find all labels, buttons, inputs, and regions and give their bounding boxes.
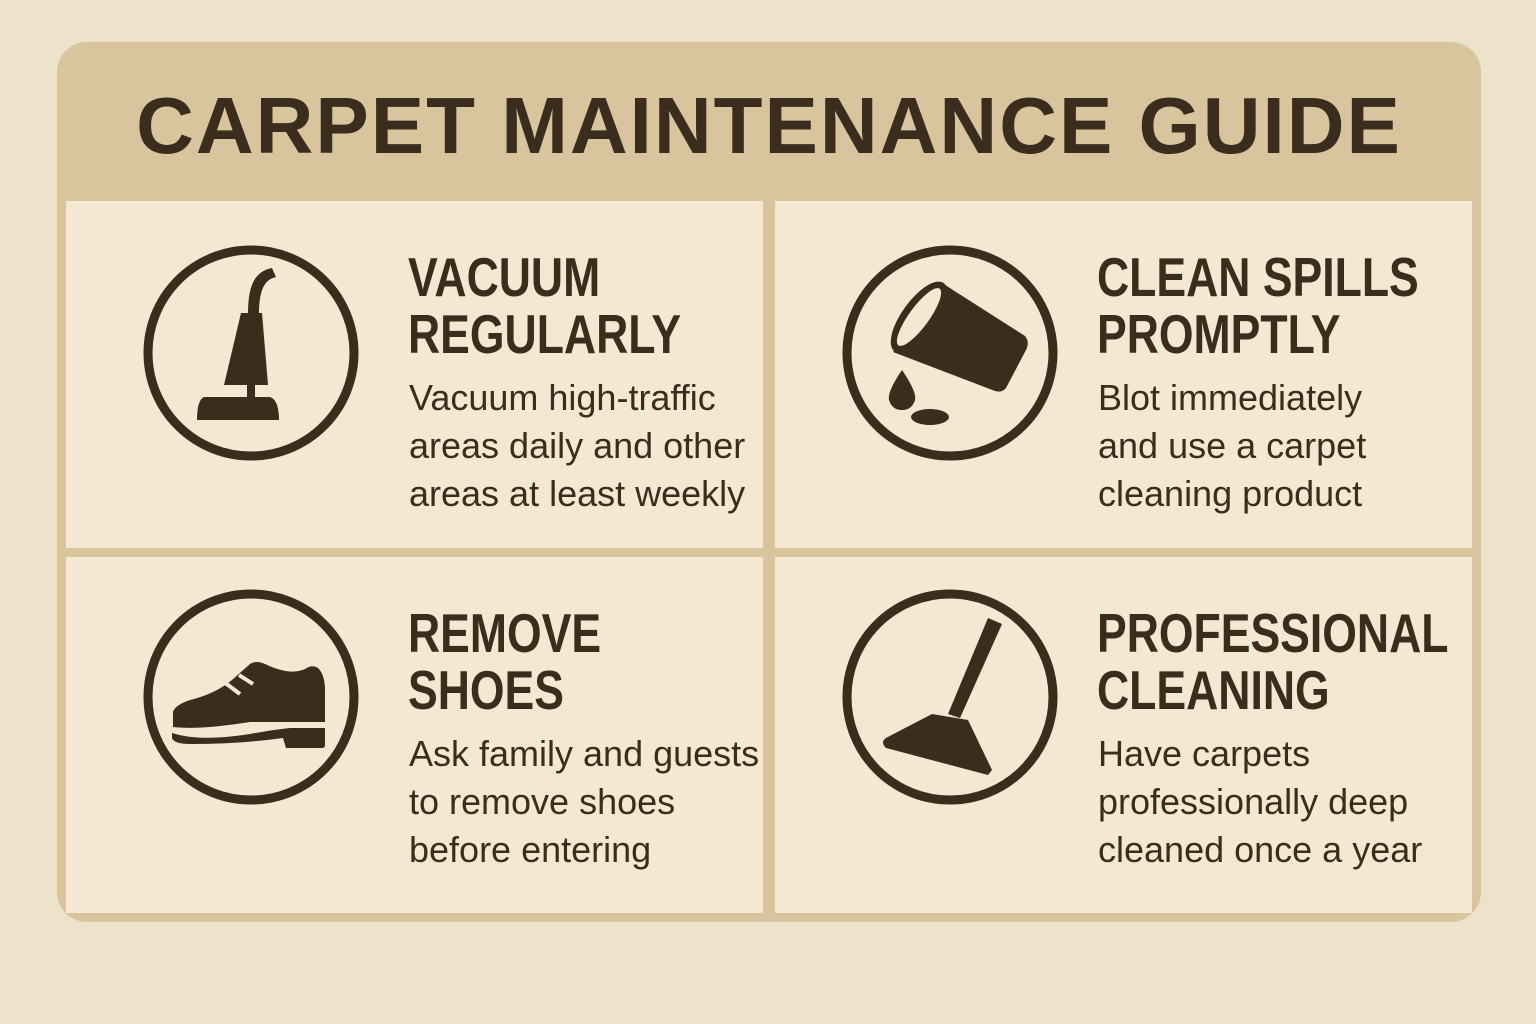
heading: spills: CLEAN SPILLS [1097, 246, 1419, 308]
text: shoes: before entering [409, 829, 651, 870]
heading: shoes [408, 602, 601, 721]
heading: vacuum: VACUUM [408, 246, 600, 308]
text: professional: cleaned once a year [1098, 829, 1422, 870]
icon: spill [847, 250, 1053, 456]
text: shoes: Ask family and guests [409, 733, 759, 774]
text: spills: Blot immediately [1098, 377, 1362, 418]
card [57, 42, 1481, 922]
heading: professional: CLEANING [1097, 659, 1330, 721]
text: spills [1098, 377, 1366, 514]
text: professional: professionally deep [1098, 781, 1408, 822]
text: professional [1098, 733, 1422, 870]
text: professional: Have carpets [1098, 733, 1310, 774]
panel: professional [775, 557, 1472, 913]
heading: spills [1097, 246, 1419, 365]
text: vacuum: areas at least weekly [409, 473, 745, 514]
heading: vacuum [408, 246, 681, 365]
panel: vacuum [66, 201, 763, 548]
title: CARPET MAINTENANCE GUIDE [136, 81, 1402, 170]
text: spills: cleaning product [1098, 473, 1362, 514]
icon: shoe [148, 594, 354, 800]
panel: spills [775, 201, 1472, 548]
text: vacuum [409, 377, 745, 514]
heading: vacuum: REGULARLY [408, 303, 681, 365]
text: vacuum: areas daily and other [409, 425, 745, 466]
text: shoes [409, 733, 759, 870]
text: spills: and use a carpet [1098, 425, 1366, 466]
panel: shoes [66, 557, 763, 913]
text: vacuum: Vacuum high-traffic [409, 377, 716, 418]
heading: shoes: REMOVE [408, 602, 601, 664]
heading: professional: PROFESSIONAL [1097, 602, 1448, 664]
icon: vacuum [148, 250, 354, 456]
icon: professional cleaning [847, 594, 1053, 800]
heading: shoes: SHOES [408, 659, 564, 721]
text: shoes: to remove shoes [409, 781, 675, 822]
heading: spills: PROMPTLY [1097, 303, 1340, 365]
heading: professional [1097, 602, 1448, 721]
